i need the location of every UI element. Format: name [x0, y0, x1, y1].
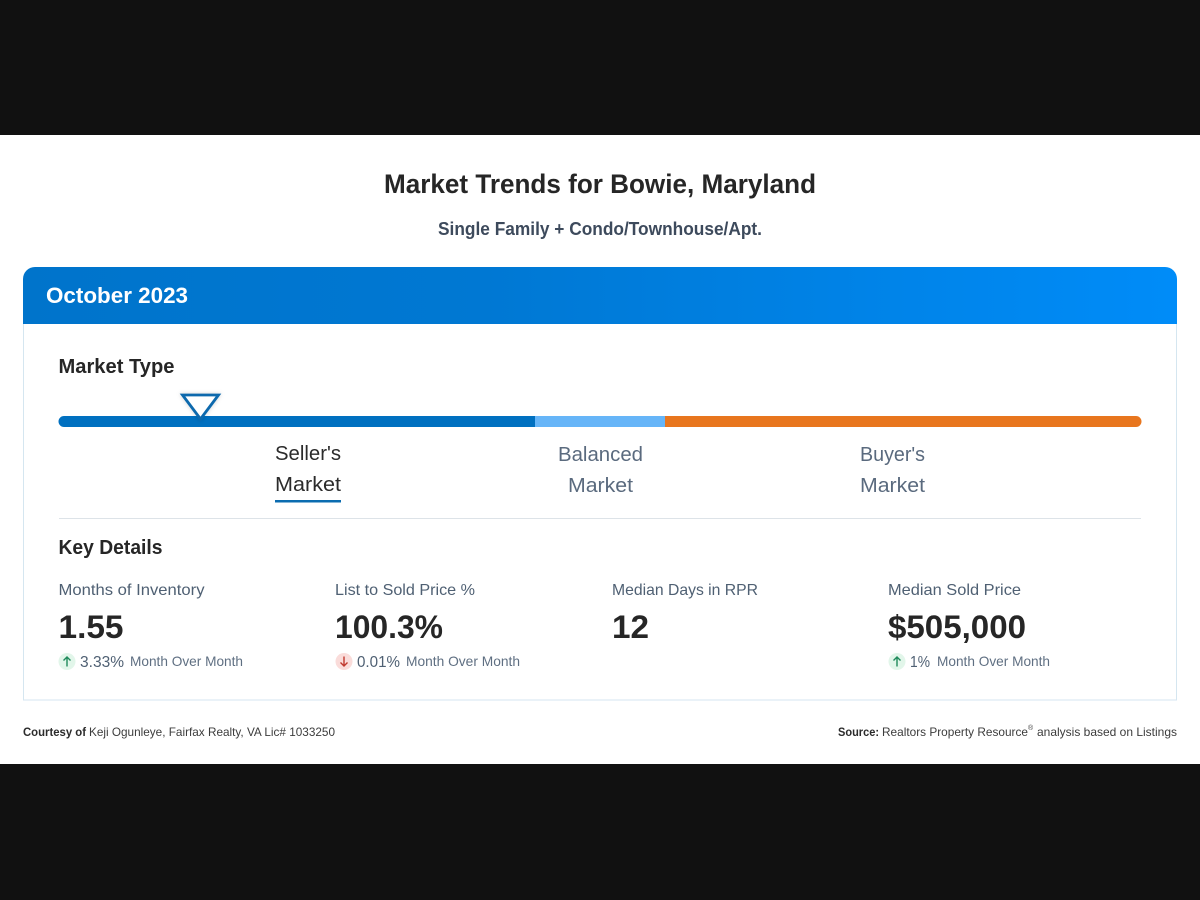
- metric: list to sold price: Month Over Month: [406, 653, 520, 669]
- heading: market type: Market Type: [58, 356, 174, 378]
- panel: market card: [23, 267, 1177, 700]
- metric: median sold price: 1%: [910, 654, 930, 671]
- icon: up arrow: [888, 653, 906, 670]
- subtitle: Single Family + Condo/Townhouse/Apt.: [438, 219, 762, 239]
- metric: median days in rpr: [612, 582, 758, 645]
- metric: months of inventory: Months of Inventory: [58, 582, 204, 599]
- footer: source: Realtors Property Resource: [882, 725, 1028, 739]
- label: seller's market (active): Seller's: [275, 443, 341, 465]
- icon: up arrow: [58, 653, 76, 670]
- heading: key details: Key Details: [58, 537, 162, 559]
- label: balanced market: Balanced: [558, 444, 643, 466]
- metric: median days in rpr: 12: [612, 609, 649, 645]
- footer: source: Source:: [838, 725, 879, 739]
- icon: down arrow: [336, 653, 352, 670]
- card header: [23, 267, 1177, 324]
- metric: months of inventory: 1.55: [58, 609, 124, 645]
- footer: source: [838, 724, 1177, 739]
- metric: median days in rpr: Median Days in RPR: [612, 582, 758, 599]
- market type scale bar: [58, 416, 1142, 427]
- metric: months of inventory: [58, 582, 243, 671]
- label: seller's market (active): [275, 443, 341, 502]
- metric: list to sold price: 0.01%: [357, 654, 400, 671]
- metric: list to sold price: 100.3%: [335, 609, 443, 645]
- metric: months of inventory: Month Over Month: [130, 653, 243, 669]
- metric: median sold price: Month Over Month: [937, 653, 1050, 669]
- metric: months of inventory: 3.33%: [80, 654, 124, 671]
- metric: median sold price: $505,000: [888, 609, 1026, 645]
- label: seller's market (active): Market: [275, 474, 341, 496]
- footer: source: analysis based on Listings: [1037, 725, 1177, 739]
- label: buyer's market: [860, 444, 925, 497]
- label: balanced market: [558, 444, 643, 497]
- title: Market Trends for Bowie, Maryland: [384, 169, 816, 199]
- metric: median sold price: [888, 582, 1050, 671]
- footer: courtesy: Keji Ogunleye, Fairfax Realty, VA Lic# 1033250: [89, 725, 335, 739]
- metric: list to sold price: List to Sold Price %: [335, 582, 475, 599]
- footer: courtesy: Courtesy of: [23, 725, 87, 739]
- metric: list to sold price: [335, 582, 520, 671]
- label: balanced market: Market: [568, 475, 633, 497]
- label: buyer's market: Market: [860, 475, 925, 497]
- footer: source: ®: [1028, 724, 1034, 732]
- metric: median sold price: Median Sold Price: [888, 582, 1021, 599]
- header date: October 2023: [46, 283, 188, 308]
- label: buyer's market: Buyer's: [860, 444, 925, 466]
- marker: current market position: [182, 395, 218, 419]
- white report area: [0, 135, 1200, 764]
